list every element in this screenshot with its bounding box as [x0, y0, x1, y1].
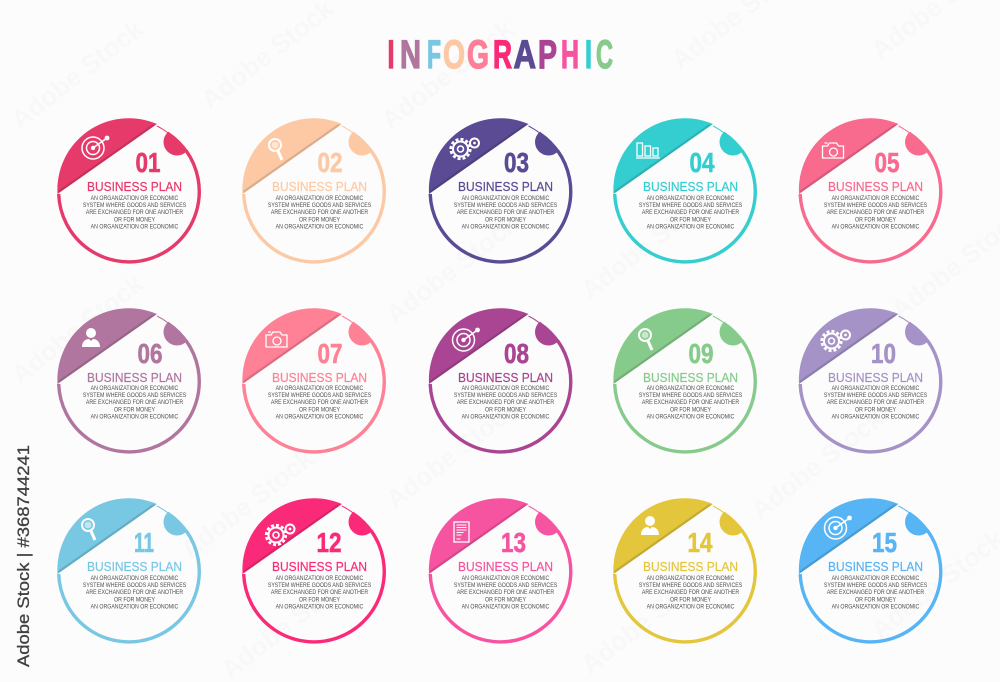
number 01: 01	[136, 147, 160, 178]
description: AN ORGANIZATION OR ECONOMIC	[647, 224, 734, 231]
icon: camera	[266, 332, 287, 347]
description: OR FOR MONEY	[114, 597, 155, 604]
card 04	[613, 118, 755, 262]
description: ARE EXCHANGED FOR ONE ANOTHER	[86, 590, 183, 596]
background watermark: Adobe Stock	[215, 563, 359, 682]
description: AN ORGANIZATION OR ECONOMIC	[276, 576, 363, 582]
description: SYSTEM WHERE GOODS AND SERVICES	[83, 203, 186, 209]
description	[83, 196, 186, 231]
description: AN ORGANIZATION OR ECONOMIC	[91, 386, 178, 392]
card 07	[242, 308, 384, 452]
description: SYSTEM WHERE GOODS AND SERVICES	[454, 583, 557, 589]
description	[454, 386, 557, 421]
description	[824, 196, 927, 231]
description: OR FOR MONEY	[299, 407, 340, 414]
description: ARE EXCHANGED FOR ONE ANOTHER	[457, 400, 554, 406]
title: A	[514, 33, 536, 77]
heading: BUSINESS PLAN	[87, 560, 182, 574]
background watermark: Adobe Stock	[575, 558, 719, 680]
description: ARE EXCHANGED FOR ONE ANOTHER	[86, 400, 183, 406]
description: AN ORGANIZATION OR ECONOMIC	[91, 576, 178, 582]
number 03: 03	[504, 147, 529, 178]
description: SYSTEM WHERE GOODS AND SERVICES	[268, 583, 371, 589]
number 12: 12	[316, 527, 342, 558]
description	[639, 196, 742, 231]
description: OR FOR MONEY	[485, 597, 526, 604]
description: AN ORGANIZATION OR ECONOMIC	[832, 576, 919, 582]
description: OR FOR MONEY	[670, 217, 711, 224]
description: ARE EXCHANGED FOR ONE ANOTHER	[271, 400, 368, 406]
heading: BUSINESS PLAN	[643, 371, 738, 385]
description	[268, 576, 371, 611]
description: SYSTEM WHERE GOODS AND SERVICES	[83, 583, 186, 589]
description: AN ORGANIZATION OR ECONOMIC	[832, 604, 919, 611]
description: AN ORGANIZATION OR ECONOMIC	[91, 196, 178, 202]
description	[268, 386, 371, 421]
background watermark: Adobe Stock	[745, 403, 889, 525]
description: SYSTEM WHERE GOODS AND SERVICES	[268, 203, 371, 209]
title: H	[561, 33, 579, 77]
description: OR FOR MONEY	[299, 597, 340, 604]
description	[824, 386, 927, 421]
icon: magnifier	[82, 519, 95, 540]
description: SYSTEM WHERE GOODS AND SERVICES	[824, 393, 927, 399]
description	[824, 576, 927, 611]
card 03	[429, 118, 571, 262]
description: ARE EXCHANGED FOR ONE ANOTHER	[457, 210, 554, 216]
background watermark: Adobe Stock	[375, 13, 519, 135]
title: I	[585, 33, 592, 77]
description: AN ORGANIZATION OR ECONOMIC	[276, 414, 363, 421]
number 14: 14	[688, 527, 713, 558]
description: ARE EXCHANGED FOR ONE ANOTHER	[86, 210, 183, 216]
description: SYSTEM WHERE GOODS AND SERVICES	[454, 203, 557, 209]
heading: BUSINESS PLAN	[272, 560, 367, 574]
heading: BUSINESS PLAN	[643, 560, 738, 574]
description: OR FOR MONEY	[670, 407, 711, 414]
description: AN ORGANIZATION OR ECONOMIC	[91, 224, 178, 231]
title: F	[427, 33, 441, 77]
description: OR FOR MONEY	[299, 217, 340, 224]
icon: gears	[266, 524, 294, 545]
card 09	[613, 308, 755, 452]
description: AN ORGANIZATION OR ECONOMIC	[832, 196, 919, 202]
description: AN ORGANIZATION OR ECONOMIC	[462, 386, 549, 392]
description: OR FOR MONEY	[855, 597, 896, 604]
side stock label: Adobe Stock | #368744241	[14, 445, 33, 667]
number 09: 09	[688, 338, 714, 369]
description: AN ORGANIZATION OR ECONOMIC	[832, 386, 919, 392]
description: OR FOR MONEY	[114, 407, 155, 414]
title: R	[493, 33, 512, 77]
description: ARE EXCHANGED FOR ONE ANOTHER	[642, 590, 739, 596]
description: AN ORGANIZATION OR ECONOMIC	[276, 224, 363, 231]
icon: target	[82, 136, 109, 159]
description: SYSTEM WHERE GOODS AND SERVICES	[824, 203, 927, 209]
background watermark: Adobe Stock	[175, 443, 319, 565]
description	[639, 386, 742, 421]
number 06: 06	[138, 338, 162, 369]
title: O	[443, 33, 465, 77]
description: AN ORGANIZATION OR ECONOMIC	[462, 604, 549, 611]
card 08	[429, 308, 571, 452]
number 10: 10	[871, 338, 896, 369]
number 15: 15	[872, 527, 897, 558]
description: SYSTEM WHERE GOODS AND SERVICES	[639, 203, 742, 209]
heading: BUSINESS PLAN	[828, 180, 923, 194]
description: AN ORGANIZATION OR ECONOMIC	[276, 196, 363, 202]
heading: BUSINESS PLAN	[828, 560, 923, 574]
title: N	[400, 33, 421, 77]
number 08: 08	[504, 338, 529, 369]
description: OR FOR MONEY	[670, 597, 711, 604]
number 04: 04	[690, 147, 715, 178]
description: AN ORGANIZATION OR ECONOMIC	[647, 604, 734, 611]
description: ARE EXCHANGED FOR ONE ANOTHER	[827, 400, 924, 406]
icon: bar chart	[636, 143, 660, 158]
description: AN ORGANIZATION OR ECONOMIC	[276, 386, 363, 392]
card 06	[57, 308, 199, 452]
heading: BUSINESS PLAN	[458, 371, 553, 385]
heading: BUSINESS PLAN	[87, 371, 182, 385]
card 11	[57, 498, 199, 642]
description: SYSTEM WHERE GOODS AND SERVICES	[454, 393, 557, 399]
description: ARE EXCHANGED FOR ONE ANOTHER	[827, 210, 924, 216]
icon: gears	[451, 138, 479, 159]
heading: BUSINESS PLAN	[643, 180, 738, 194]
number 11: 11	[134, 527, 154, 558]
description: OR FOR MONEY	[855, 217, 896, 224]
heading: BUSINESS PLAN	[458, 180, 553, 194]
background watermark: Adobe Stock	[5, 268, 149, 390]
description	[454, 576, 557, 611]
icon: gears	[822, 330, 850, 351]
description: AN ORGANIZATION OR ECONOMIC	[647, 386, 734, 392]
description: SYSTEM WHERE GOODS AND SERVICES	[639, 583, 742, 589]
description: OR FOR MONEY	[485, 217, 526, 224]
card 12	[242, 498, 384, 642]
description: AN ORGANIZATION OR ECONOMIC	[91, 414, 178, 421]
description: AN ORGANIZATION OR ECONOMIC	[647, 414, 734, 421]
icon: person	[82, 328, 100, 347]
description: ARE EXCHANGED FOR ONE ANOTHER	[457, 590, 554, 596]
icon: magnifier	[639, 329, 652, 350]
description: ARE EXCHANGED FOR ONE ANOTHER	[271, 590, 368, 596]
description: ARE EXCHANGED FOR ONE ANOTHER	[642, 210, 739, 216]
title	[388, 33, 613, 77]
description: OR FOR MONEY	[855, 407, 896, 414]
number 07: 07	[318, 338, 342, 369]
description: ARE EXCHANGED FOR ONE ANOTHER	[271, 210, 368, 216]
description: AN ORGANIZATION OR ECONOMIC	[462, 224, 549, 231]
number 05: 05	[874, 147, 900, 178]
description	[83, 576, 186, 611]
icon: camera	[822, 143, 844, 158]
heading: BUSINESS PLAN	[87, 180, 182, 194]
description: AN ORGANIZATION OR ECONOMIC	[647, 576, 734, 582]
background watermark: Adobe Stock	[380, 208, 524, 330]
description: SYSTEM WHERE GOODS AND SERVICES	[268, 393, 371, 399]
title: C	[596, 33, 613, 77]
description: ARE EXCHANGED FOR ONE ANOTHER	[642, 400, 739, 406]
background watermark: Adobe Stock	[380, 393, 524, 515]
description: AN ORGANIZATION OR ECONOMIC	[462, 414, 549, 421]
title: G	[467, 33, 489, 77]
description	[639, 576, 742, 611]
card 02	[242, 118, 384, 262]
description: SYSTEM WHERE GOODS AND SERVICES	[83, 393, 186, 399]
heading: BUSINESS PLAN	[458, 560, 553, 574]
icon: target	[824, 516, 852, 539]
card 14	[613, 498, 755, 642]
card 10	[799, 308, 941, 452]
number 02: 02	[318, 147, 342, 178]
description	[454, 196, 557, 231]
card 13	[429, 498, 571, 642]
description: AN ORGANIZATION OR ECONOMIC	[462, 196, 549, 202]
heading: BUSINESS PLAN	[272, 180, 367, 194]
title: I	[388, 33, 394, 77]
description	[268, 196, 371, 231]
description: AN ORGANIZATION OR ECONOMIC	[832, 414, 919, 421]
description: AN ORGANIZATION OR ECONOMIC	[276, 604, 363, 611]
icon: document	[454, 522, 469, 542]
description: AN ORGANIZATION OR ECONOMIC	[91, 604, 178, 611]
icon: target	[452, 328, 480, 351]
description: OR FOR MONEY	[114, 217, 155, 224]
description: SYSTEM WHERE GOODS AND SERVICES	[639, 393, 742, 399]
icon: magnifier	[269, 139, 282, 160]
card 15	[799, 498, 941, 642]
card 01	[57, 118, 199, 262]
heading: BUSINESS PLAN	[272, 371, 367, 385]
description: AN ORGANIZATION OR ECONOMIC	[462, 576, 549, 582]
number 13: 13	[501, 527, 526, 558]
background watermark: Adobe Stock	[5, 13, 149, 135]
title: P	[538, 33, 557, 77]
icon: person	[641, 516, 659, 535]
heading: BUSINESS PLAN	[828, 371, 923, 385]
description	[83, 386, 186, 421]
description: ARE EXCHANGED FOR ONE ANOTHER	[827, 590, 924, 596]
description: SYSTEM WHERE GOODS AND SERVICES	[824, 583, 927, 589]
description: AN ORGANIZATION OR ECONOMIC	[647, 196, 734, 202]
description: OR FOR MONEY	[485, 407, 526, 414]
background watermark: Adobe Stock	[575, 183, 719, 305]
description: AN ORGANIZATION OR ECONOMIC	[832, 224, 919, 231]
card 05	[799, 118, 941, 262]
